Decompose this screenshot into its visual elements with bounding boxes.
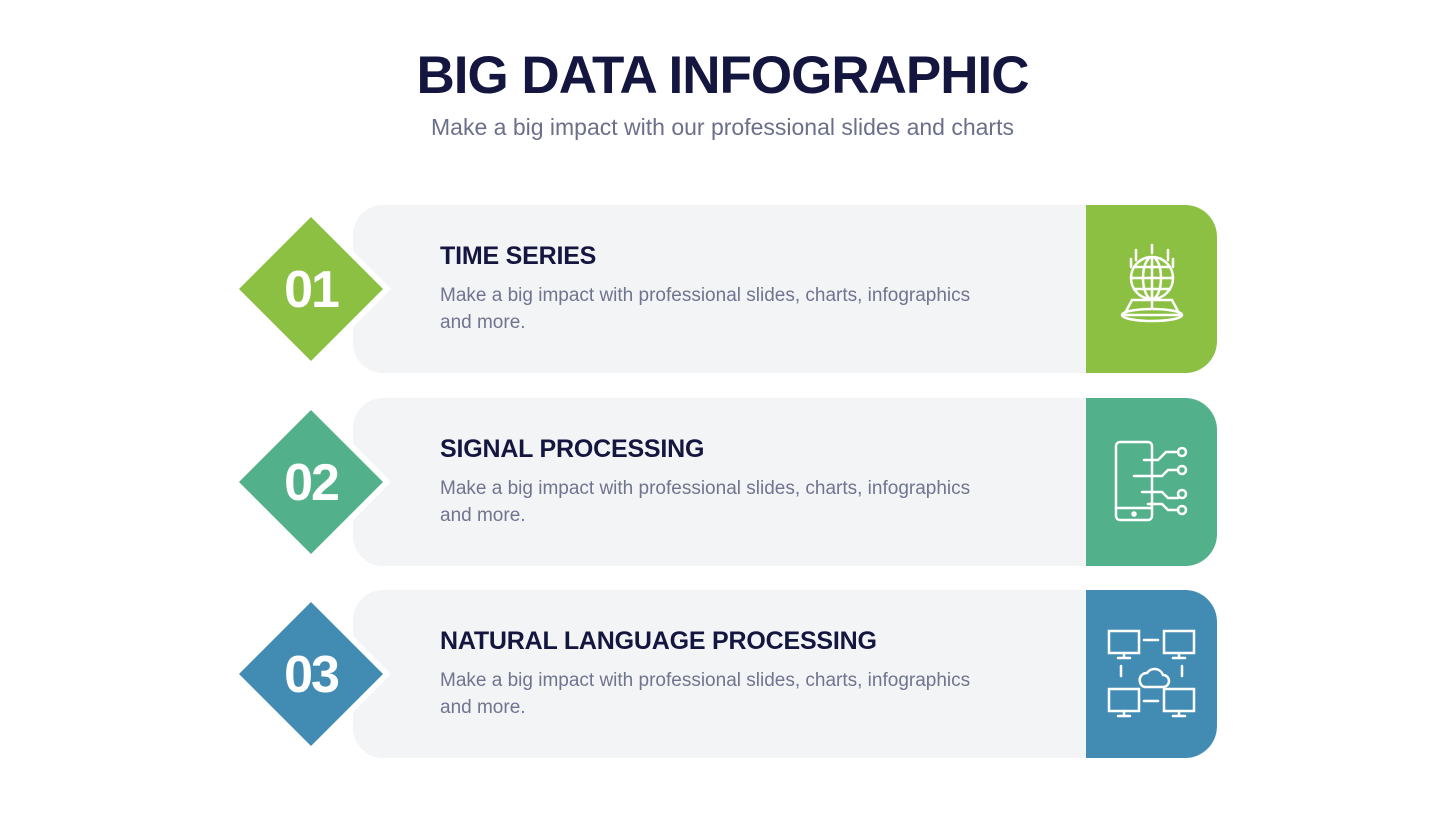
diamond 01: 01 <box>284 261 339 319</box>
title: BIG DATA INFOGRAPHIC <box>416 46 1029 105</box>
diamond 02 <box>239 410 390 554</box>
row 2 <box>239 398 1217 566</box>
row 1 <box>239 205 1217 373</box>
heading 1: TIME SERIES <box>440 242 596 270</box>
icon block: globe <box>1086 205 1217 373</box>
icon block: phone signals <box>1086 398 1217 566</box>
diamond 02: 02 <box>284 454 338 512</box>
text 2: Make a big impact with professional slides, charts, infographics and more. <box>440 478 970 526</box>
diamond 03: 03 <box>284 646 339 704</box>
icon block: network <box>1086 590 1217 758</box>
heading 3: NATURAL LANGUAGE PROCESSING <box>440 627 877 655</box>
panel 1 <box>353 205 1217 373</box>
panel 3 <box>353 590 1217 758</box>
subtitle: Make a big impact with our professional slides and charts <box>431 114 1014 140</box>
heading 2: SIGNAL PROCESSING <box>440 435 704 463</box>
diamond 03 <box>239 602 390 746</box>
diamond 01 <box>239 217 390 361</box>
row 3 <box>239 590 1217 758</box>
text 1: Make a big impact with professional slides, charts, infographics and more. <box>440 285 970 333</box>
panel 2 <box>353 398 1217 566</box>
text 3: Make a big impact with professional slides, charts, infographics and more. <box>440 670 970 718</box>
